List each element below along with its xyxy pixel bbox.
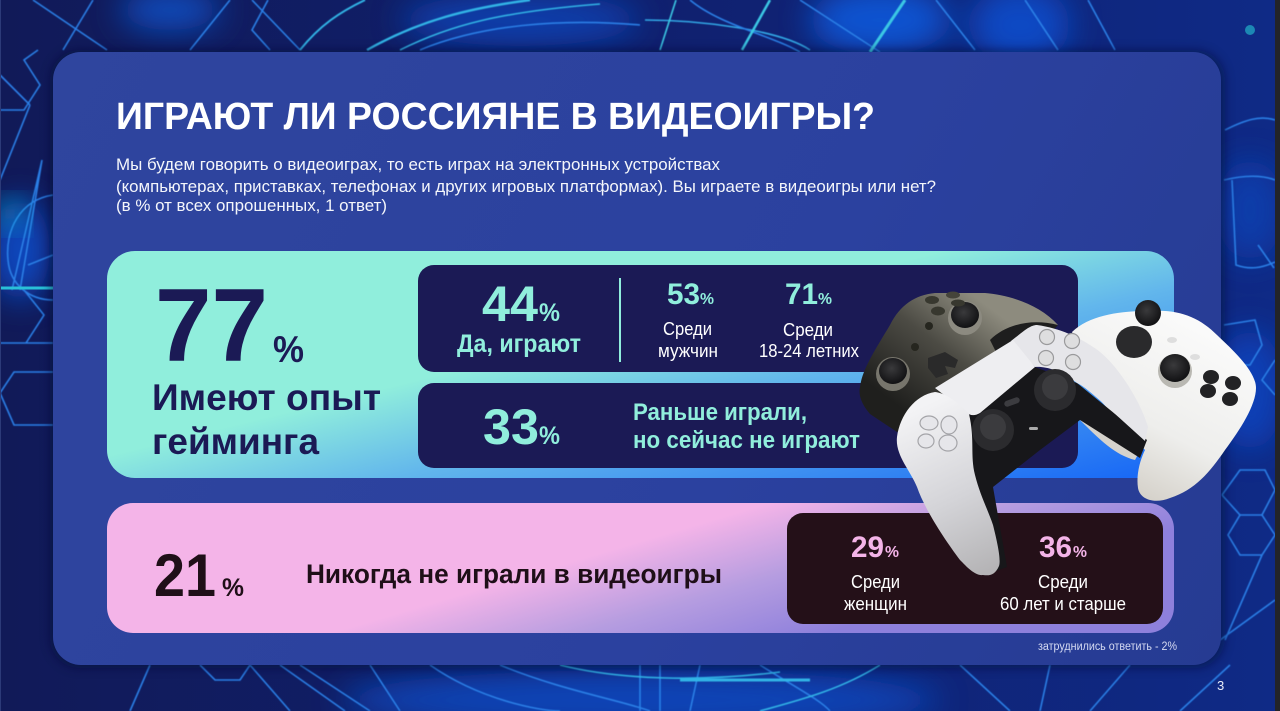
label: gaming experience: гейминга [152,421,319,462]
card: currently play: 44 [482,276,538,332]
page number: 3 [1217,678,1224,693]
sub: face buttons [1038,330,1080,370]
panel: gaming experience [107,251,1174,478]
card: never played demographics: % [885,544,899,561]
panel: never played: % [222,574,244,602]
card: currently play: % [539,299,560,327]
card: never played demographics [787,513,1163,624]
icon: black controller [859,292,1058,432]
card: never played demographics: 36 [1039,531,1072,564]
icon: white controller [1072,300,1256,501]
card: currently play: Среди [783,320,833,340]
stat: 77 percent: % [273,329,304,370]
card: used to play: % [539,422,560,450]
panel: never played [107,503,1174,633]
card: currently play: 18-24 летних [759,341,859,361]
icon: white gamepad with dark centre [897,325,1148,575]
card: currently play: 53 [667,278,700,311]
card: never played demographics: Среди [851,572,900,592]
card: currently play: Да, играют [457,330,581,358]
card: never played demographics: женщин [844,594,907,614]
label: gaming experience: Имеют опыт [152,377,381,418]
panel: never played: 21 [154,542,216,609]
card: currently play: Среди [663,319,712,339]
main panel [50,50,1225,668]
card: currently play: мужчин [658,341,718,361]
card: never played demographics: 60 лет и старше [1000,594,1126,614]
card: used to play: Раньше играли, [633,399,807,426]
subtitle: survey question: (в % от всех опрошенных, 1 ответ) [116,197,387,215]
stat: 77 percent: 77 [155,268,268,384]
card: used to play: но сейчас не играют [633,427,860,454]
subtitle: survey question [116,156,936,215]
card: currently play: % [818,291,832,308]
card: never played demographics: Среди [1038,572,1088,592]
subtitle: survey question: Мы будем говорить о видеоиграх, то есть играх на электронных устройствах [116,156,721,174]
card: never played demographics: 29 [851,531,884,564]
icon: game controllers [859,292,1256,575]
footnote: затруднились ответить - 2% [1038,641,1177,653]
title: ИГРАЮТ ЛИ РОССИЯНЕ В ВИДЕОИГРЫ? [116,96,875,138]
card: used to play: 33 [483,399,539,455]
subtitle: survey question: (компьютерах, приставках, телефонах и других игровых платформах). Вы играете в видеоигры или нет? [116,178,936,196]
card: used to play [418,383,1078,468]
panel: never played: Никогда не играли в видеоигры [306,559,722,589]
card: never played demographics: % [1073,544,1087,561]
sub: d-pad [918,416,957,451]
label: gaming experience [152,377,381,462]
card: currently play: % [700,291,714,308]
card: currently play [418,265,1078,372]
sub: thumbsticks [972,369,1076,451]
card: currently play: 71 [785,278,818,311]
